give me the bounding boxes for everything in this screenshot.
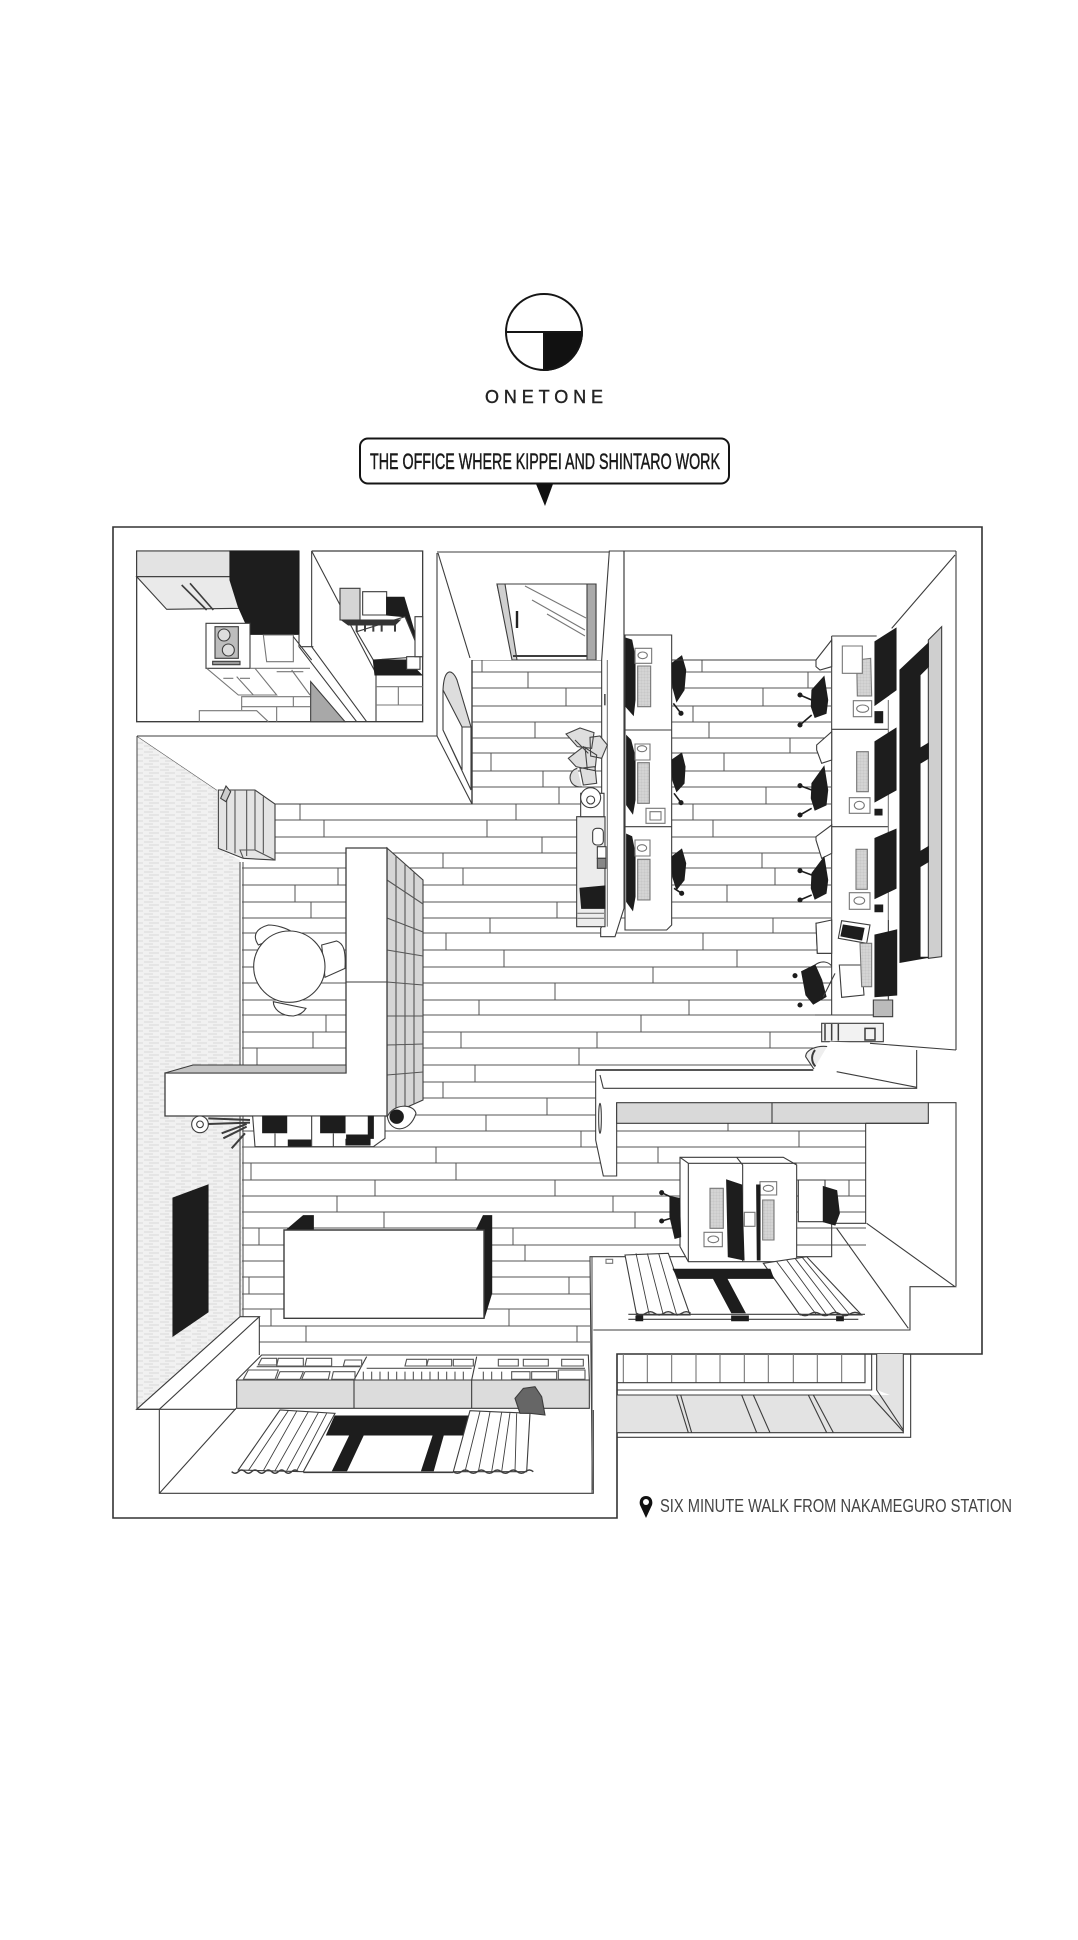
panel: left desks and partition bbox=[566, 551, 956, 1050]
logo wordmark: ONETONE bbox=[485, 387, 603, 407]
speech bubble title: THE OFFICE WHERE KIPPEI AND SHINTARO WORK bbox=[370, 449, 720, 474]
keyboards bbox=[638, 666, 651, 900]
chairs left row bbox=[672, 656, 686, 895]
rolling wheel bbox=[387, 1106, 416, 1129]
paper roll bbox=[192, 1116, 250, 1148]
right desks items bbox=[624, 551, 956, 1050]
shelf top textured bbox=[165, 1065, 346, 1073]
panel: lower right room bbox=[590, 1042, 956, 1490]
office chair bbox=[793, 962, 835, 1007]
panel: storage under partition bbox=[192, 1106, 416, 1148]
partition L bbox=[165, 848, 387, 1116]
right chair bbox=[798, 1180, 839, 1225]
potted plant bbox=[806, 1046, 851, 1077]
wall window bbox=[900, 627, 942, 962]
panel: corner desk with laptop bbox=[793, 920, 897, 1077]
chairs right row bbox=[798, 677, 828, 902]
double desk bbox=[680, 1157, 797, 1262]
wood plank floor bbox=[242, 660, 866, 1342]
panel: round table and chairs bbox=[254, 925, 345, 1016]
mouse pads bbox=[635, 648, 665, 856]
right monitors bbox=[875, 628, 896, 898]
curtain left bbox=[625, 1253, 691, 1315]
printer box bbox=[822, 1023, 883, 1042]
dark cabinet bbox=[230, 551, 299, 634]
white wall cover bbox=[596, 1042, 956, 1176]
left chair bbox=[660, 1191, 681, 1238]
refrigerator bbox=[137, 551, 240, 610]
shelf box bbox=[816, 920, 832, 953]
central black monitor bbox=[727, 1180, 744, 1260]
curtain left bbox=[232, 1410, 335, 1473]
curtain right bbox=[453, 1411, 533, 1473]
panel: brick wall left bbox=[137, 736, 243, 1409]
wall between rooms bbox=[293, 551, 367, 722]
panel: cabinet upper left bbox=[218, 786, 275, 860]
logo bbox=[485, 294, 603, 407]
monitor bbox=[875, 930, 897, 997]
water cooler bbox=[581, 788, 604, 817]
plant bbox=[566, 728, 607, 787]
desks row left bbox=[625, 635, 672, 930]
floor plan outer frame bbox=[113, 527, 982, 1518]
blackout window bbox=[673, 1269, 773, 1313]
right keyboards bbox=[856, 658, 872, 889]
paper and pads bbox=[842, 646, 872, 909]
speech bubble title bbox=[360, 438, 729, 506]
panel: L-shaped partition with shelves bbox=[165, 848, 423, 1116]
wall panel black bbox=[173, 1185, 208, 1336]
laptop bbox=[838, 921, 870, 943]
location note bbox=[640, 1496, 1012, 1518]
panel: upper ledge wall bbox=[137, 552, 609, 804]
outdoor balcony bbox=[617, 1354, 911, 1437]
small plant bbox=[515, 1387, 545, 1415]
kitchen counter and sink bbox=[207, 635, 310, 695]
side shelves bbox=[816, 640, 832, 953]
panel: bottom room with bench and window bbox=[137, 1317, 593, 1493]
panel: kitchen and washroom bbox=[137, 551, 423, 722]
bookshelf bbox=[387, 848, 423, 1116]
partition wall bbox=[601, 551, 624, 937]
window blackout bbox=[327, 1416, 468, 1471]
grey baseboard band bbox=[617, 1103, 956, 1287]
storage bench bbox=[237, 1355, 589, 1408]
hatched floor patch bbox=[311, 682, 345, 722]
stove bbox=[206, 623, 250, 668]
logo mark bbox=[506, 294, 582, 370]
bottom-room right wall line bbox=[591, 1257, 593, 1493]
keyboards and pads bbox=[710, 1188, 774, 1240]
handrail bbox=[443, 672, 471, 790]
low cabinet bbox=[577, 817, 606, 927]
icon: map pin bbox=[640, 1496, 652, 1518]
large white table bbox=[284, 1216, 492, 1318]
washroom shelf bbox=[340, 588, 423, 675]
curtain right bbox=[763, 1257, 862, 1316]
papers bbox=[839, 965, 864, 997]
monitors bbox=[626, 638, 635, 910]
entry door bbox=[497, 584, 596, 660]
